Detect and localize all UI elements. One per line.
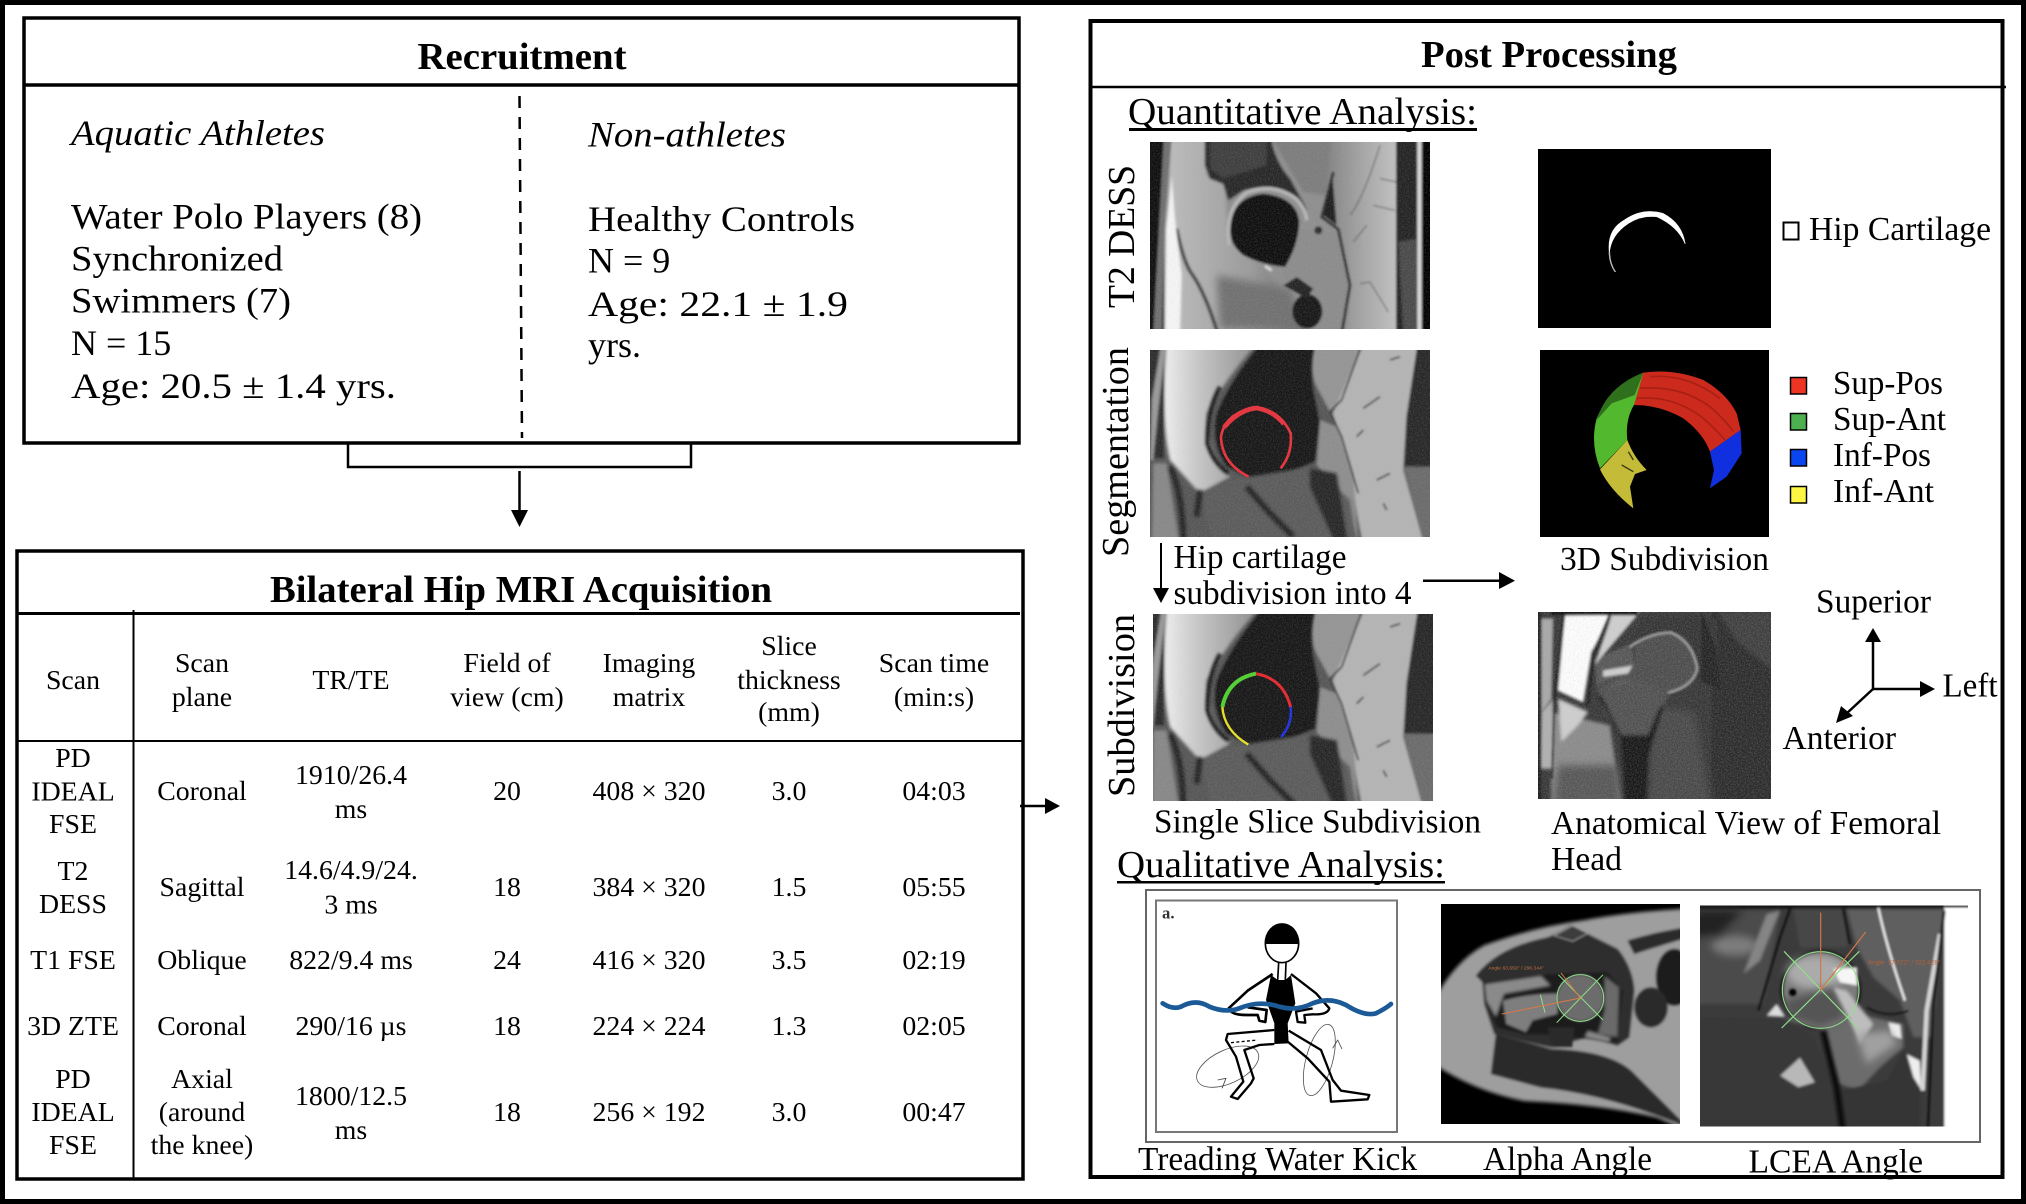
angle annotation: Angle: 37.572° / 322.428° [1868, 959, 1941, 967]
table row: T1 FSE: 24 [493, 945, 521, 976]
table header: (min:s) [894, 682, 974, 713]
table row: T2 DESS: 05:55 [902, 872, 966, 903]
table row: 3D ZTE: 18 [493, 1011, 521, 1042]
table row: 3D ZTE: 1.3 [772, 1011, 806, 1042]
table row: PD IDEAL FSE axial: 18 [493, 1097, 521, 1128]
table header: plane [172, 682, 232, 713]
legend item: Inf-Ant: Inf-Ant [1833, 473, 1935, 510]
image: segmentation MRI [1150, 350, 1430, 537]
arrow: down to subdivision [1153, 543, 1169, 603]
table row: T2 DESS: 3 ms [324, 890, 378, 920]
heading: post processing: Post Processing [1421, 34, 1677, 76]
angle annotation: Angle 63.650° / 296.344° [1488, 965, 1544, 971]
caption: hip cartilage subdivision: Hip cartilage [1174, 539, 1346, 576]
text block: aquatic athletes: Aquatic Athletes [69, 113, 325, 153]
table row: PD IDEAL FSE coronal: 04:03 [902, 776, 966, 807]
panel: recruitment [24, 18, 1019, 443]
legend item: Inf-Pos: Inf-Pos [1833, 437, 1931, 474]
bracket connector [348, 443, 691, 467]
table row: T1 FSE: 822/9.4 ms [289, 945, 413, 976]
table header: Scan [46, 665, 100, 696]
text block: non-athletes: yrs. [588, 325, 641, 365]
table row: 3D ZTE: 3D ZTE [27, 1011, 119, 1042]
table row: T1 FSE: 416 × 320 [593, 945, 705, 976]
table row: PD IDEAL FSE coronal: PD [55, 743, 91, 774]
caption: single slice subdivision: Single Slice Subdivision [1154, 804, 1481, 840]
table row: 3D ZTE: 290/16 µs [296, 1011, 406, 1042]
table row: 3D ZTE: 224 × 224 [593, 1011, 706, 1042]
heading: recruitment: Recruitment [418, 36, 627, 78]
arrow: recruitment to acquisition [511, 471, 528, 527]
legend item: Sup-Ant: Sup-Ant [1833, 401, 1947, 438]
ring subdivision: sup-pos arc [1256, 674, 1291, 707]
legend item: Inf-Ant [1790, 473, 1935, 510]
table row: PD IDEAL FSE axial: 00:47 [902, 1097, 966, 1128]
image: T2 DESS sagittal MRI [1150, 142, 1430, 329]
table row: PD IDEAL FSE coronal: IDEAL [31, 776, 115, 808]
table header: Imaging [603, 648, 695, 679]
table row: T1 FSE: 02:19 [902, 945, 966, 976]
image: 3D cartilage subdivision [1540, 350, 1769, 537]
table row: PD IDEAL FSE coronal: FSE [49, 809, 97, 840]
image: subdivision MRI [1153, 614, 1433, 801]
table row: PD IDEAL FSE axial: 1800/12.5 [295, 1081, 407, 1112]
text block: non-athletes: Age: 22.1 ± 1.9 [588, 284, 848, 324]
image: anatomical view of femoral head [1538, 612, 1771, 799]
caption: 3D subdivision: 3D Subdivision [1560, 541, 1769, 578]
text block: non-athletes: N = 9 [588, 240, 670, 280]
subheading: quantitative analysis: Quantitative Analysis: [1128, 91, 1477, 133]
table row: T2 DESS: 18 [493, 872, 521, 903]
text block: aquatic athletes: Age: 20.5 ± 1.4 yrs. [71, 366, 396, 406]
table row: PD IDEAL FSE axial: 256 × 192 [593, 1097, 705, 1128]
row label: T2 DESS: T2 DESS [1101, 165, 1143, 308]
text block: aquatic athletes [69, 113, 422, 406]
table row: 3D ZTE: Coronal [157, 1011, 247, 1042]
table row: PD IDEAL FSE axial: PD [55, 1064, 91, 1095]
ring subdivision: inf-pos arc [1281, 707, 1291, 737]
table row: PD IDEAL FSE axial: 3.0 [772, 1097, 806, 1128]
caption: treading water kick: Treading Water Kick [1138, 1141, 1417, 1178]
table row: PD IDEAL FSE coronal: 1910/26.4 [295, 760, 407, 791]
image: hip cartilage mask [1538, 149, 1771, 328]
axis label: anterior: Anterior [1782, 720, 1896, 757]
table row: T2 DESS [39, 855, 966, 920]
table header: Scan time [879, 648, 989, 679]
table row: T2 DESS: 14.6/4.9/24. [284, 855, 418, 886]
image: alpha angle axial MRI [1441, 904, 1680, 1124]
subheading: qualitative analysis: Qualitative Analysis: [1117, 844, 1445, 886]
caption: hip cartilage subdivision [1174, 539, 1412, 612]
heading: acquisition: Bilateral Hip MRI Acquisition [270, 569, 772, 611]
table row: PD IDEAL FSE axial [31, 1064, 966, 1161]
panel: post processing [1090, 21, 2006, 1180]
table row: PD IDEAL FSE axial: (around [159, 1097, 245, 1128]
arrow: to 3D subdivision [1423, 572, 1515, 589]
legend item: Sup-Pos: Sup-Pos [1833, 365, 1943, 402]
caption: hip cartilage subdivision: subdivision into 4 [1174, 575, 1412, 612]
text block: aquatic athletes: Synchronized [71, 238, 283, 278]
axis label: superior: Superior [1816, 584, 1931, 620]
table row: T1 FSE: 3.5 [772, 945, 806, 976]
table header: Field of [463, 648, 551, 679]
image: treading water kick [1156, 900, 1397, 1132]
legend: subregions [1790, 365, 1947, 510]
table row: PD IDEAL FSE axial: ms [335, 1115, 367, 1146]
table header: (mm) [758, 697, 820, 728]
table row: PD IDEAL FSE coronal: ms [335, 794, 367, 825]
table row: PD IDEAL FSE coronal: 20 [493, 776, 521, 807]
table row: PD IDEAL FSE coronal: 408 × 320 [593, 776, 705, 807]
table row: PD IDEAL FSE coronal [31, 743, 966, 840]
table header: Scan [175, 648, 229, 679]
text block: non-athletes: Non-athletes [587, 114, 786, 154]
text block: aquatic athletes: N = 15 [71, 323, 171, 363]
table row: PD IDEAL FSE coronal: Coronal [157, 776, 247, 807]
table row: PD IDEAL FSE axial: Axial [171, 1064, 233, 1095]
table header: Slice [761, 631, 817, 662]
table row: T2 DESS: Sagittal [160, 872, 245, 903]
table row: PD IDEAL FSE coronal: 3.0 [772, 776, 806, 807]
table row: PD IDEAL FSE axial: IDEAL [31, 1097, 115, 1128]
table row: T1 FSE [30, 945, 966, 976]
legend item: Inf-Pos [1790, 437, 1931, 474]
text block: non-athletes: Healthy Controls [588, 199, 855, 239]
label: panel a: a. [1162, 903, 1174, 922]
ring subdivision: inf-ant arc [1222, 707, 1248, 745]
table row: T2 DESS: T2 [58, 856, 88, 887]
orientation axes [1782, 584, 1998, 757]
arrow: acquisition to post processing [1020, 798, 1060, 814]
table row: T1 FSE: Oblique [157, 945, 247, 976]
table header: matrix [613, 682, 685, 713]
table row: 3D ZTE: 02:05 [902, 1011, 966, 1042]
table row: PD IDEAL FSE axial: FSE [49, 1130, 97, 1161]
table row: T2 DESS: 1.5 [772, 872, 806, 903]
table row: T1 FSE: T1 FSE [30, 945, 116, 976]
panel: qualitative analysis images [1146, 890, 1980, 1142]
panel: bilateral hip MRI acquisition [17, 551, 1023, 1179]
text block: aquatic athletes: Water Polo Players (8) [71, 196, 422, 236]
table row: PD IDEAL FSE axial: the knee) [151, 1130, 253, 1161]
legend: hip cartilage: Hip Cartilage [1809, 211, 1991, 248]
table header: view (cm) [450, 682, 564, 713]
caption: anatomical view: Head [1551, 841, 1622, 878]
caption: anatomical view: Anatomical View of Femoral [1551, 805, 1941, 842]
ring subdivision: sup-ant arc [1222, 674, 1256, 707]
image: LCEA angle coronal MRI [1693, 902, 1975, 1134]
table header [46, 631, 989, 728]
table row: T2 DESS: DESS [39, 889, 107, 920]
table row: T2 DESS: 384 × 320 [593, 872, 705, 903]
row label: subdivision: Subdivision [1101, 614, 1143, 797]
table header: TR/TE [312, 665, 390, 696]
caption: alpha angle: Alpha Angle [1483, 1141, 1652, 1178]
caption: anatomical view [1551, 805, 1941, 878]
row label: segmentation: Segmentation [1095, 347, 1137, 557]
caption: LCEA angle: LCEA Angle [1748, 1144, 1923, 1180]
table header: thickness [737, 665, 841, 696]
text block: non-athletes [587, 114, 855, 365]
text block: aquatic athletes: Swimmers (7) [71, 280, 291, 320]
axis label: left: Left [1942, 668, 1998, 704]
table row: 3D ZTE [27, 1011, 966, 1042]
